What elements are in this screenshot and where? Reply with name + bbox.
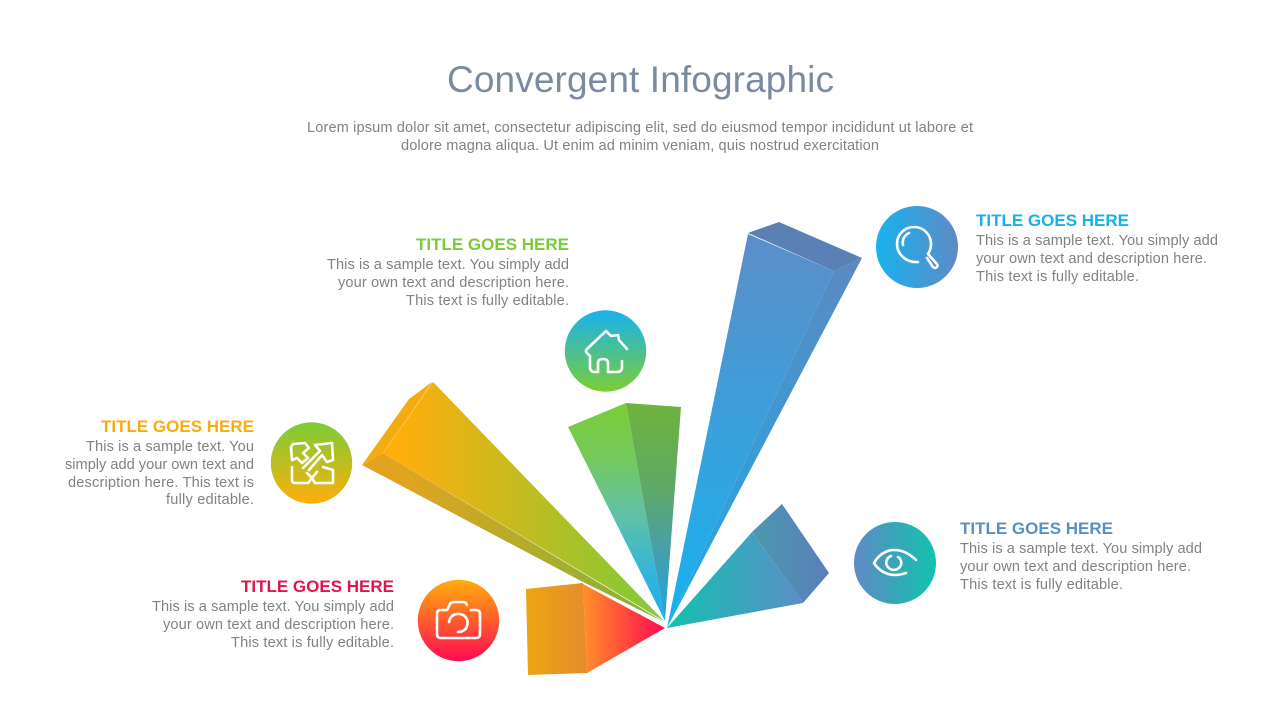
item: yellow — [65, 417, 352, 508]
text block — [152, 599, 394, 651]
text block: your own text and description here. — [163, 617, 394, 633]
icon: house — [565, 310, 646, 392]
item: red — [152, 577, 499, 661]
heading: TITLE GOES HERE — [976, 211, 1129, 230]
bar: teal — [667, 504, 829, 628]
bar: blue — [667, 222, 862, 628]
text block — [65, 439, 254, 508]
bar: green — [568, 403, 681, 621]
text block — [960, 541, 1202, 593]
text block: your own text and description here. — [976, 251, 1207, 267]
icon: camera — [418, 580, 499, 661]
icon: four arrows — [271, 422, 352, 504]
subtitle text: dolore magna aliqua. Ut enim ad minim veniam, quis nostrud exercitation — [401, 138, 879, 154]
bar: red — [526, 583, 665, 675]
heading: TITLE GOES HERE — [101, 417, 254, 436]
text block: description here. This text is — [68, 475, 254, 491]
text block: This is a sample text. You simply add — [327, 257, 569, 273]
text block: This text is fully editable. — [976, 269, 1139, 285]
icon: magnifier — [876, 206, 958, 288]
text block — [976, 233, 1218, 285]
text block: fully editable. — [166, 492, 254, 508]
text block: your own text and description here. — [338, 275, 569, 291]
text block: This is a sample text. You simply add — [976, 233, 1218, 249]
icon: eye — [854, 522, 936, 604]
heading: TITLE GOES HERE — [241, 577, 394, 596]
item: blue top right — [876, 206, 1218, 288]
text block: This text is fully editable. — [231, 635, 394, 651]
text block: This is a sample text. You simply add — [152, 599, 394, 615]
heading: TITLE GOES HERE — [960, 519, 1113, 538]
item: teal — [854, 519, 1202, 604]
text block: This text is fully editable. — [406, 293, 569, 309]
text block: simply add your own text and — [65, 457, 254, 473]
title: Convergent Infographic — [447, 59, 834, 100]
subtitle text: Lorem ipsum dolor sit amet, consectetur adipiscing elit, sed do eiusmod tempor incididunt ut labore et — [307, 120, 973, 136]
text block: your own text and description here. — [960, 559, 1191, 575]
heading: TITLE GOES HERE — [416, 235, 569, 254]
text block: This is a sample text. You simply add — [960, 541, 1202, 557]
bar: yellow — [362, 382, 664, 622]
convergent 3D bars — [362, 222, 862, 675]
item: green — [327, 235, 646, 392]
text block — [327, 257, 569, 309]
text block: This is a sample text. You — [86, 439, 254, 455]
subtitle text — [307, 120, 973, 154]
text block: This text is fully editable. — [960, 577, 1123, 593]
